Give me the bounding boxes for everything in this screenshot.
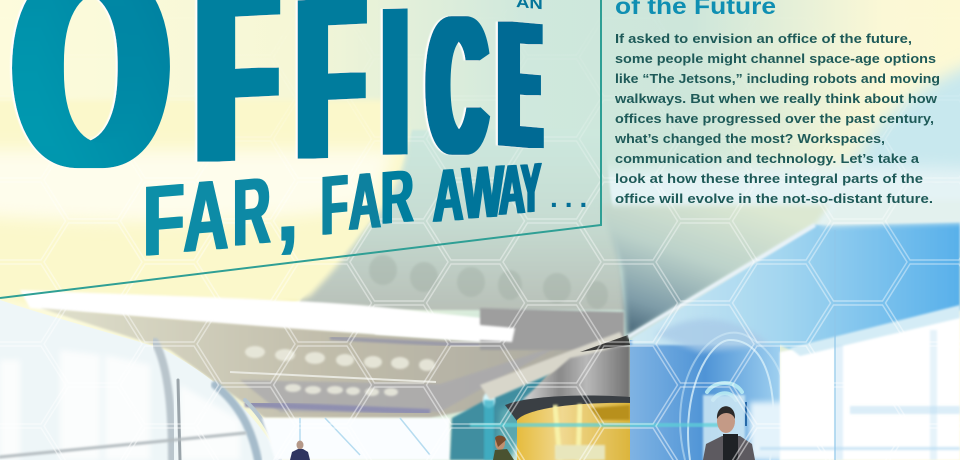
title line: FAR, FAR AWAY ...: Y bbox=[521, 149, 541, 229]
intro paragraph: walkways. But when we really think about how bbox=[614, 91, 938, 106]
blue glass wall bbox=[630, 340, 780, 460]
intro paragraph: look at how these three integral parts of the bbox=[615, 171, 923, 186]
intro paragraph: offices have progressed over the past century, bbox=[615, 111, 934, 126]
speaker discs on upper ceiling bbox=[369, 255, 608, 309]
title line: FAR, FAR AWAY ...: A bbox=[433, 152, 463, 238]
intro paragraph: communication and technology. Let’s take a bbox=[615, 151, 920, 166]
pale band beneath intro text bbox=[590, 165, 960, 250]
person: woman by pod bbox=[493, 436, 514, 460]
bright strip light and grey duct bbox=[480, 308, 624, 350]
white light band bbox=[20, 290, 520, 345]
title line: FAR, FAR AWAY ...: A bbox=[184, 158, 228, 274]
wall circular tech rings bbox=[680, 333, 787, 460]
title line: FAR, FAR AWAY ...: F bbox=[143, 164, 185, 278]
sky-blue glow right edge bbox=[800, 50, 960, 240]
title line: FAR, FAR AWAY ...: W bbox=[462, 149, 504, 235]
title: A LONG TIME AGO IN AN OFFICE FAR, FAR AWAY bbox=[16, 0, 594, 278]
title line: FAR, FAR AWAY ...: F bbox=[321, 157, 348, 254]
horizontal glowing light beam bbox=[470, 423, 730, 427]
wifi signal symbol bbox=[707, 383, 742, 400]
ceiling lights bbox=[245, 346, 435, 396]
lower ceiling beams bbox=[40, 308, 625, 418]
title line: FAR, FAR AWAY ...: R bbox=[381, 154, 414, 241]
intro paragraph: office will evolve in the not-so-distant future. bbox=[615, 191, 933, 206]
intro paragraph: what’s changed the most? Workspaces, bbox=[614, 131, 885, 146]
hexagon overlay pattern bbox=[0, 126, 960, 460]
white curved glass hall bbox=[0, 300, 280, 460]
title line: FAR, FAR AWAY ... bbox=[143, 149, 541, 278]
upper ceiling bbox=[300, 130, 625, 310]
title line: FAR, FAR AWAY ...: A bbox=[349, 155, 381, 247]
ellipsis dots: ... bbox=[550, 182, 594, 213]
person: man in corridor bbox=[290, 440, 310, 460]
title word: OFFICE bbox=[16, 0, 539, 233]
person: man in grey jacket bbox=[703, 406, 755, 460]
yellow curved sail bbox=[0, 100, 407, 323]
intro paragraph: If asked to envision an office of the future, bbox=[615, 31, 912, 46]
sloped teal ceiling wedge bbox=[600, 205, 830, 337]
sloped beam bbox=[480, 332, 625, 400]
title line: FAR, FAR AWAY ...: A bbox=[499, 149, 525, 230]
glass hall ribs bbox=[0, 342, 280, 460]
title panel frame line bbox=[0, 0, 601, 298]
intro paragraph: some people might channel space-age options bbox=[615, 51, 936, 66]
bright corridor bbox=[262, 418, 450, 460]
title line: FAR, FAR AWAY ...: , bbox=[278, 156, 297, 261]
title line: FAR, FAR AWAY ...: R bbox=[233, 158, 271, 267]
gold pod bbox=[517, 403, 630, 460]
silver cone above pod bbox=[522, 345, 630, 400]
intro paragraph: like “The Jetsons,” including robots and moving bbox=[615, 71, 940, 86]
intro paragraph bbox=[614, 31, 940, 206]
right white window wall bbox=[780, 315, 960, 460]
teal alcove bbox=[450, 360, 560, 460]
